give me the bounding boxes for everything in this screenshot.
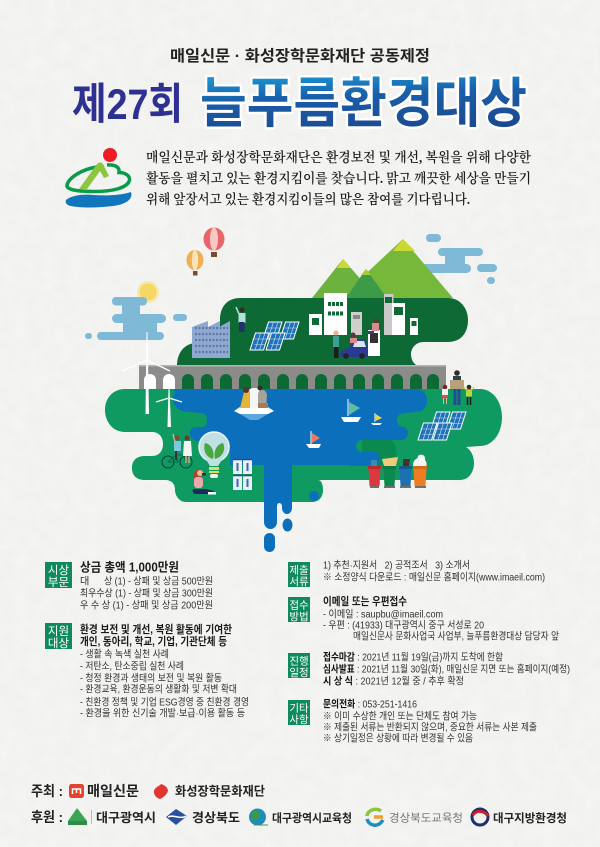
eligibility text	[80, 622, 249, 720]
footer: sponsors: 대구광역시	[96, 811, 156, 825]
documents text: ※ 소정양식 다운로드 : 매일신문 홈페이지(www.imaeil.com)	[323, 570, 545, 584]
family with recycling box	[442, 370, 474, 405]
icon: Hwaseong foundation logo	[154, 784, 168, 799]
label box: eligibility: 대상	[48, 637, 69, 650]
person standing	[236, 307, 246, 332]
prize text: 최우수상 (1) - 상패 및 상금 300만원	[80, 588, 213, 600]
schedule text: 접수마감 : 2021년 11월 19일(금)까지 도착에 한함	[323, 650, 504, 664]
label box: submission: 접수	[289, 600, 309, 612]
eligibility text: 개인, 동아리, 학교, 기업, 기관단체 등	[80, 634, 227, 648]
prize text: 대	[80, 576, 89, 588]
schedule text	[323, 650, 570, 688]
title: edition number: 제27회	[72, 81, 183, 129]
label box: eligibility: 지원	[48, 624, 69, 638]
label box: documents: 제출	[289, 564, 309, 576]
icon: Daegu environment office logo	[472, 809, 488, 825]
submission text: 이메일 또는 우편접수	[323, 594, 407, 608]
upper green land	[177, 298, 468, 366]
eligibility text: 환경 보전 및 개선, 복원 활동에 기여한	[80, 622, 232, 636]
polar bear on iceberg	[234, 386, 274, 420]
icon: Gyeongbuk logo	[166, 809, 187, 825]
lower green land	[105, 389, 502, 502]
icon: award logo	[66, 148, 131, 208]
sailboats	[306, 399, 382, 448]
darker green inlet	[350, 440, 397, 466]
icon: Gyeongbuk education logo	[367, 809, 383, 825]
documents text: 1) 추천·지원서 2) 공적조서 3) 소개서	[323, 560, 470, 572]
icon: Daegu education globe	[249, 808, 268, 826]
prize text: 우 수 상 (1) - 상패 및 상금 200만원	[80, 600, 213, 612]
intro paragraph: 활동을 펼치고 있는 환경지킴이를 찾습니다. 맑고 깨끗한 세상을 만들기	[146, 170, 531, 186]
left cloud	[85, 297, 187, 340]
recycling bins	[368, 455, 427, 487]
submission text: - 우편 : (41933) 대구광역시 중구 서성로 20	[323, 620, 484, 632]
label box: schedule: 진행	[289, 656, 309, 668]
other notes text	[323, 698, 537, 744]
title	[72, 74, 527, 134]
eligibility text: - 환경을 위한 신기술 개발·보급·이용 활동 등	[80, 706, 245, 720]
water drops	[264, 491, 319, 552]
label box: other notes: 사항	[289, 714, 309, 726]
label box: submission: 방법	[289, 611, 309, 623]
footer: hosts: 화성장학문화재단	[175, 784, 265, 798]
label box: documents: 서류	[289, 576, 309, 588]
footer: sponsors: 후원 :	[31, 809, 63, 825]
panel: other notes	[288, 698, 537, 744]
label box: prize	[45, 562, 72, 589]
submission text: - 이메일 : saupbu@imaeil.com	[323, 608, 443, 620]
footer: sponsors: 대구광역시교육청	[272, 811, 352, 825]
title: award name: 늘푸름환경대상	[200, 74, 527, 134]
submission text	[323, 594, 560, 642]
footer: hosts: 매일신문	[87, 783, 139, 799]
prize text	[80, 560, 213, 612]
heading: co-organizers: 매일신문 · 화성장학문화재단 공동제정	[170, 47, 430, 65]
eligibility text: - 저탄소, 탄소중립 실천 사례	[80, 660, 184, 672]
other notes text: 문의전화 : 053-251-1416	[323, 698, 417, 710]
other notes text: ※ 제출된 서류는 반환되지 않으며, 중요한 서류는 사본 제출	[323, 722, 537, 734]
panel: submission	[288, 594, 560, 642]
blue water with drips	[173, 389, 427, 529]
footer: hosts	[31, 783, 265, 799]
footer: sponsors	[31, 808, 567, 826]
label box: schedule: 일정	[289, 666, 309, 679]
electric car and charger	[333, 318, 380, 359]
label box: other notes	[288, 700, 310, 726]
footer: sponsors: 대구지방환경청	[493, 811, 567, 825]
eligibility text: - 생활 속 녹색 실천 사례	[80, 648, 169, 660]
right cloud	[420, 234, 497, 284]
icon: Daegu logo	[68, 808, 92, 825]
batteries	[233, 460, 252, 490]
illustration: eco landscape	[85, 228, 502, 552]
eligibility text: - 친환경 정책 및 기업 ESG경영 중 친환경 경영	[80, 696, 249, 708]
person reading	[193, 469, 216, 494]
other notes text: ※ 이미 수상한 개인 또는 단체도 참여 가능	[323, 710, 477, 722]
label box: submission	[288, 597, 310, 623]
icon: hot air balloons	[186, 228, 224, 276]
intro paragraph: 매일신문과 화성장학문화재단은 환경보전 및 개선, 복원을 위해 다양한	[146, 149, 532, 165]
prize text: 상 (1) - 상패 및 상금 500만원	[104, 576, 213, 588]
label box: eligibility	[45, 623, 72, 650]
icon: light bulb with leaves	[199, 432, 229, 478]
documents text	[323, 560, 545, 584]
label box: other notes: 기타	[289, 702, 309, 714]
icon: Maeil logo	[69, 784, 84, 798]
label box: prize: 부문	[48, 576, 69, 589]
footer: hosts: 주최 :	[31, 783, 63, 799]
panel: eligibility	[45, 622, 249, 720]
panel: prize	[45, 560, 213, 612]
wind turbines	[122, 332, 182, 427]
submission text: 매일신문사 문화사업국 사업부, 늘푸름환경대상 담당자 앞	[353, 630, 560, 642]
label box: prize: 시상	[48, 564, 69, 577]
prize text: 상금 총액 1,000만원	[80, 560, 179, 574]
icon: sun	[137, 281, 159, 303]
schedule text: 시 상 식 : 2021년 12월 중 / 추후 확정	[323, 674, 464, 688]
panel: schedule	[288, 650, 570, 688]
aqueduct bridge	[139, 365, 446, 390]
label box: schedule	[288, 653, 310, 679]
eligibility text: - 청정 환경과 생태의 보전 및 복원 활동	[80, 672, 222, 684]
solar panels lower right	[418, 412, 466, 440]
panel: documents	[288, 560, 545, 588]
footer: sponsors: 경상북도	[192, 811, 240, 825]
buildings	[192, 293, 418, 358]
footer: sponsors: 경상북도교육청	[389, 812, 463, 824]
eligibility text: - 환경교육, 환경운동의 생활화 및 저변 확대	[80, 682, 237, 696]
cyclist couple	[162, 434, 192, 468]
intro paragraph: 위해 앞장서고 있는 환경지킴이들의 많은 참여를 기다립니다.	[146, 191, 470, 207]
other notes text: ※ 상기일정은 상황에 따라 변경될 수 있음	[323, 732, 473, 744]
solar panels upper	[250, 322, 299, 350]
mountains	[312, 239, 453, 298]
label box: documents	[288, 562, 310, 588]
intro paragraph	[146, 149, 532, 207]
